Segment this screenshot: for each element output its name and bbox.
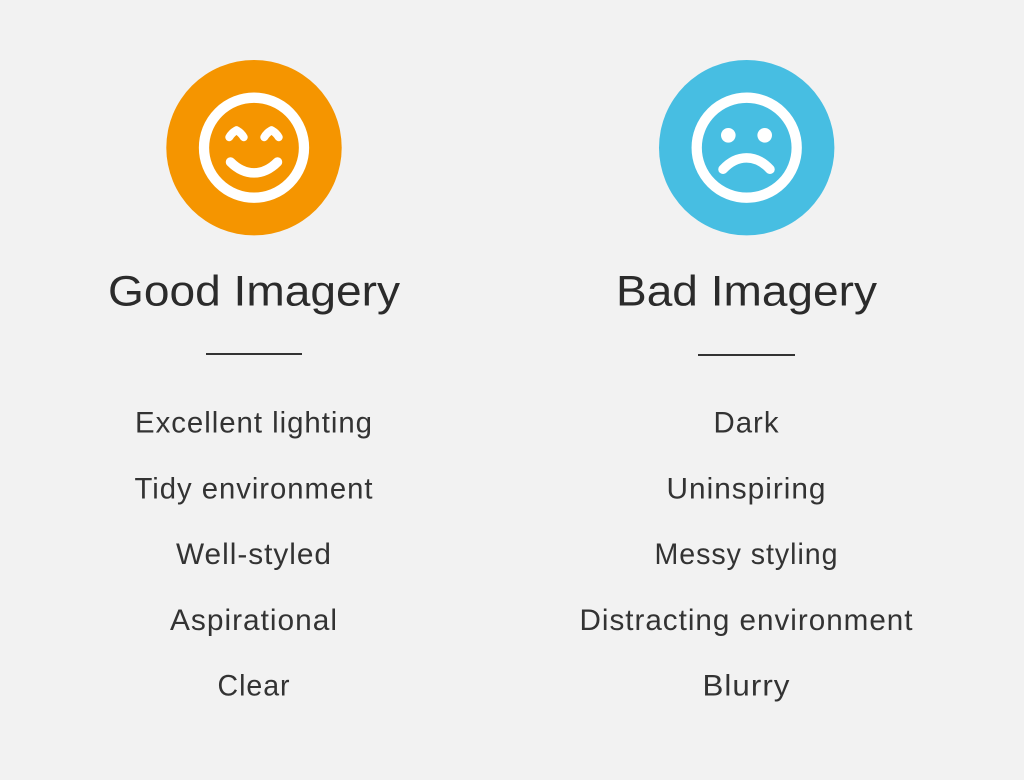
list: good qualities: Excellent lighting (135, 406, 373, 440)
list: bad qualities: Dark (714, 406, 780, 440)
panel: bad imagery (580, 60, 914, 702)
list: good qualities: Clear (218, 670, 290, 702)
divider (206, 353, 302, 355)
list: good qualities: Tidy environment (134, 472, 374, 505)
heading: Bad Imagery: Bad Imagery (616, 268, 878, 316)
list: bad qualities: Messy styling (654, 538, 838, 571)
heading: Good Imagery: Good Imagery (108, 268, 401, 316)
list: bad qualities: Uninspiring (666, 472, 826, 505)
icon: sad face (659, 60, 834, 235)
list: good qualities: Aspirational (170, 604, 338, 637)
list: good qualities: Well-styled (176, 538, 332, 571)
icon: smiling face (166, 60, 342, 235)
list: bad qualities (580, 406, 914, 702)
list: bad qualities: Blurry (702, 670, 790, 702)
divider (698, 354, 795, 356)
list: good qualities (134, 406, 374, 702)
panel: good imagery (108, 60, 401, 702)
list: bad qualities: Distracting environment (580, 604, 914, 637)
